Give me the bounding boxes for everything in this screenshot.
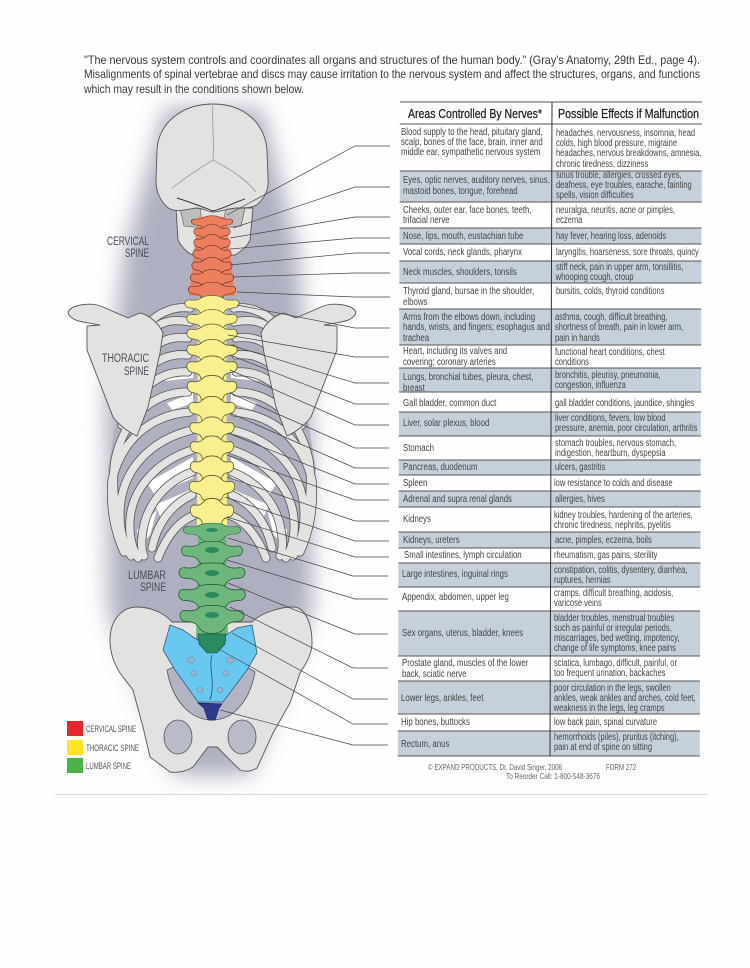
scapulae and clavicles — [68, 304, 356, 436]
row: blood supply: middle ear, sympathetic nervous system — [401, 146, 541, 157]
pelvis — [110, 607, 312, 772]
row: sex organs: Sex organs, uterus, bladder, knees — [402, 627, 524, 638]
row: kidneys and ureters: Kidneys, ureters — [403, 534, 460, 545]
row: lungs: congestion, influenza — [555, 379, 627, 390]
label: cervical spine: SPINE — [125, 248, 149, 260]
row: lower legs — [401, 682, 696, 713]
row: adrenal — [403, 493, 605, 504]
row: lower legs: weakness in the legs, leg cramps — [553, 702, 665, 713]
table header: Areas Controlled By Nerves* — [408, 106, 542, 121]
row: eyes: deafness, eye troubles, earache, fainting — [556, 179, 692, 190]
legend — [67, 721, 139, 773]
row: arms: Arms from the elbows down, including — [403, 311, 535, 322]
row: neck muscles: stiff neck, pain in upper arm, tonsillitis, — [556, 261, 683, 272]
row: arms: trachea — [403, 332, 430, 343]
row: lower legs: poor circulation in the legs, swollen — [554, 682, 671, 693]
row: small intestines: rheumatism, gas pains, sterility — [554, 549, 658, 560]
row: rectum: hemorrhoids (piles), pruritus (itching), — [554, 731, 679, 742]
row: nose: Nose, lips, mouth, eustachian tube — [403, 230, 523, 241]
row: blood supply: headaches, nervousness, insomnia, head — [556, 127, 695, 138]
row: large intestines: constipation, colitis, dysentery, diarrhea, — [554, 564, 687, 575]
cervical vertebrae — [188, 216, 236, 303]
intro paragraph: which may result in the conditions shown below. — [83, 83, 304, 96]
table header: Possible Effects if Malfunction — [558, 106, 699, 121]
row rules — [398, 102, 702, 756]
row: rectum — [401, 731, 679, 752]
row: stomach: stomach troubles, nervous stomach, — [555, 437, 676, 448]
row: arms: shortness of breath, pain in lower arm, — [555, 321, 683, 332]
row: prostate — [402, 657, 677, 679]
row: prostate: too frequent urination, backaches — [554, 667, 666, 678]
legend: THORACIC SPINE — [86, 743, 139, 754]
row: arms: asthma, cough, difficult breathing, — [555, 311, 668, 322]
footer credits — [428, 763, 636, 781]
pelvic inner shadow — [167, 660, 255, 720]
row: adrenal: Adrenal and supra renal glands — [403, 493, 512, 504]
row: gall bladder: gall bladder conditions, jaundice, shingles — [555, 397, 694, 408]
label: cervical spine: CERVICAL — [107, 236, 149, 248]
row: large intestines — [402, 564, 687, 585]
row: heart: Heart, including its valves and — [403, 345, 507, 356]
footer credits: FORM 272 — [606, 763, 636, 772]
row: lungs: bronchitis, pleurisy, pneumonia, — [555, 369, 660, 380]
row: nose — [403, 230, 667, 241]
row: blood supply: scalp, bones of the face, brain, inner and — [401, 136, 543, 147]
row: sex organs — [402, 612, 680, 653]
row: lower legs: Lower legs, ankles, feet — [401, 692, 484, 703]
footer credits: To Reorder Call: 1-800-548-3676 — [506, 772, 600, 781]
rib cage — [108, 300, 316, 560]
coccyx — [198, 703, 222, 720]
row: small intestines — [404, 549, 658, 560]
skull — [156, 104, 268, 257]
row: blood supply: Blood supply to the head, pituitary gland, — [401, 126, 543, 137]
footer credits: © EXPAND PRODUCTS, Dr. David Singer, 2006 — [428, 763, 562, 772]
label: thoracic spine: SPINE — [124, 366, 149, 378]
row: neck muscles — [403, 261, 683, 282]
background halo — [106, 108, 312, 775]
row: blood supply: headaches, nervous breakdowns, amnesia, — [556, 147, 701, 158]
row: sex organs: miscarriages, bed wetting, impotency, — [554, 632, 680, 643]
legend: CERVICAL SPINE — [86, 724, 136, 735]
row: cheeks: neuralgia, neuritis, acne or pimples, — [556, 204, 675, 215]
row: hip bones — [401, 716, 657, 727]
row: arms — [403, 311, 683, 343]
row: sex organs: change of life symptoms, knee pains — [554, 642, 676, 653]
obturator openings — [164, 720, 192, 754]
row: hip bones: low back pain, spinal curvature — [554, 716, 657, 727]
row: neck muscles: Neck muscles, shoulders, tonsils — [403, 266, 517, 277]
row: sex organs: such as painful or irregular periods, — [554, 622, 672, 633]
row: appendix: cramps, difficult breathing, acidosis, — [554, 587, 673, 598]
lumbar vertebrae — [179, 523, 245, 640]
row: lungs: Lungs, bronchial tubes, pleura, chest, — [403, 371, 533, 382]
row: cheeks — [403, 204, 675, 225]
thoracic vertebrae — [185, 296, 239, 531]
row: thyroid: Thyroid gland, bursae in the shoulder, — [403, 285, 534, 296]
label: lumbar spine: LUMBAR — [128, 570, 166, 582]
row: stomach — [403, 437, 676, 458]
row: blood supply: chronic tiredness, dizziness — [556, 158, 649, 169]
row: neck muscles: whooping cough, croup — [555, 271, 634, 282]
row: lungs: breast — [403, 382, 425, 393]
row: appendix — [402, 587, 673, 608]
row: prostate: Prostate gland, muscles of the lower — [402, 657, 528, 668]
row: liver: liver conditions, fevers, low blood — [555, 412, 666, 423]
row: vocal cords: Vocal cords, neck glands, pharynx — [403, 246, 522, 257]
row: eyes: Eyes, optic nerves, auditory nerves, sinus, — [403, 174, 550, 185]
row: blood supply — [401, 126, 701, 169]
row: gall bladder: Gall bladder, common duct — [403, 397, 497, 408]
row: appendix: varicose veins — [554, 597, 602, 608]
column divider — [550, 102, 552, 756]
row: heart: functional heart conditions, chest — [555, 346, 665, 357]
row: heart — [403, 345, 665, 367]
row: arms: hands, wrists, and fingers; esophagus and — [403, 321, 550, 332]
row: cheeks: eczema — [556, 214, 583, 225]
row: kidneys and ureters — [403, 534, 652, 545]
row: pancreas: ulcers, gastritis — [555, 461, 606, 472]
row: lungs — [403, 369, 660, 393]
row: hip bones: Hip bones, buttocks — [401, 716, 470, 727]
row: stomach: indigestion, heartburn, dyspepsia — [555, 447, 666, 458]
row: gall bladder — [403, 397, 694, 408]
row: thyroid: elbows — [403, 296, 428, 307]
row: pancreas — [403, 461, 606, 472]
intro paragraph: "The nervous system controls and coordinates all organs and structures of the human body." (Gray's Anatomy, 29th Ed., page 4). — [84, 54, 700, 67]
row: rectum: Rectum, anus — [401, 738, 450, 749]
row: blood supply: colds, high blood pressure, migraine — [556, 137, 677, 148]
sacrum — [163, 625, 257, 702]
row: liver — [403, 412, 698, 433]
row: nose: hay fever, hearing loss, adenoids — [556, 230, 667, 241]
table header — [408, 106, 699, 121]
row: eyes — [403, 169, 692, 200]
row: kidneys: chronic tiredness, nephritis, pyelitis — [554, 519, 671, 530]
label: lumbar spine — [128, 570, 166, 594]
shaded row bands — [398, 171, 702, 756]
row: small intestines: Small intestines, lymph circulation — [404, 549, 522, 560]
row: thyroid — [403, 285, 665, 307]
row: liver: Liver, solar plexus, blood — [403, 417, 489, 428]
legend: LUMBAR SPINE — [86, 761, 131, 772]
row: kidneys: kidney troubles, hardening of the arteries, — [554, 509, 693, 520]
label: lumbar spine: SPINE — [140, 582, 166, 594]
row: arms: pain in hands — [555, 332, 600, 343]
skeleton illustration — [68, 104, 356, 775]
label: thoracic spine — [102, 353, 149, 378]
row: eyes: mastoid bones, tongue, forehead — [403, 185, 518, 196]
row: eyes: spells, vision difficulties — [556, 189, 634, 200]
row: adrenal: allergies, hives — [555, 493, 605, 504]
row: large intestines: ruptures, hernias — [554, 574, 611, 585]
row: prostate: sciatica, lumbago, difficult, painful, or — [554, 657, 677, 668]
row: stomach: Stomach — [403, 442, 434, 453]
row: spleen — [403, 477, 673, 488]
row: lower legs: ankles, weak ankles and arches, cold feet, — [554, 692, 696, 703]
row: appendix: Appendix, abdomen, upper leg — [402, 591, 509, 602]
row: cheeks: trifacial nerve — [403, 214, 450, 225]
row: thyroid: bursitis, colds, thyroid conditions — [556, 285, 665, 296]
row: liver: pressure, anemia, poor circulation, arthritis — [555, 422, 698, 433]
row: kidneys and ureters: acne, pimples, eczema, boils — [555, 534, 652, 545]
row: eyes: sinus trouble, allergies, crossed eyes, — [556, 169, 682, 180]
row: prostate: back, sciatic nerve — [402, 668, 467, 679]
nerve table — [398, 102, 702, 756]
row: vocal cords: laryngitis, hoarseness, sore throats, quincy — [556, 246, 699, 257]
label: thoracic spine: THORACIC — [102, 353, 149, 365]
row: heart: conditions — [555, 356, 589, 367]
row: cheeks: Cheeks, outer ear, face bones, teeth, — [403, 204, 532, 215]
label: cervical spine — [107, 236, 149, 260]
row: kidneys: Kidneys — [403, 513, 431, 524]
leader lines — [217, 146, 390, 745]
row: vocal cords — [403, 246, 699, 257]
row: kidneys — [403, 509, 693, 530]
row: heart: covering; coronary arteries — [403, 356, 496, 367]
row: sex organs: bladder troubles, menstrual troubles — [554, 612, 675, 623]
row: spleen: Spleen — [403, 477, 427, 488]
intro paragraph — [83, 54, 700, 96]
row: rectum: pain at end of spine on sitting — [554, 741, 652, 752]
row: spleen: low resistance to colds and disease — [554, 477, 673, 488]
row: large intestines: Large intestines, inguinal rings — [402, 568, 508, 579]
row: pancreas: Pancreas, duodenum — [403, 461, 478, 472]
